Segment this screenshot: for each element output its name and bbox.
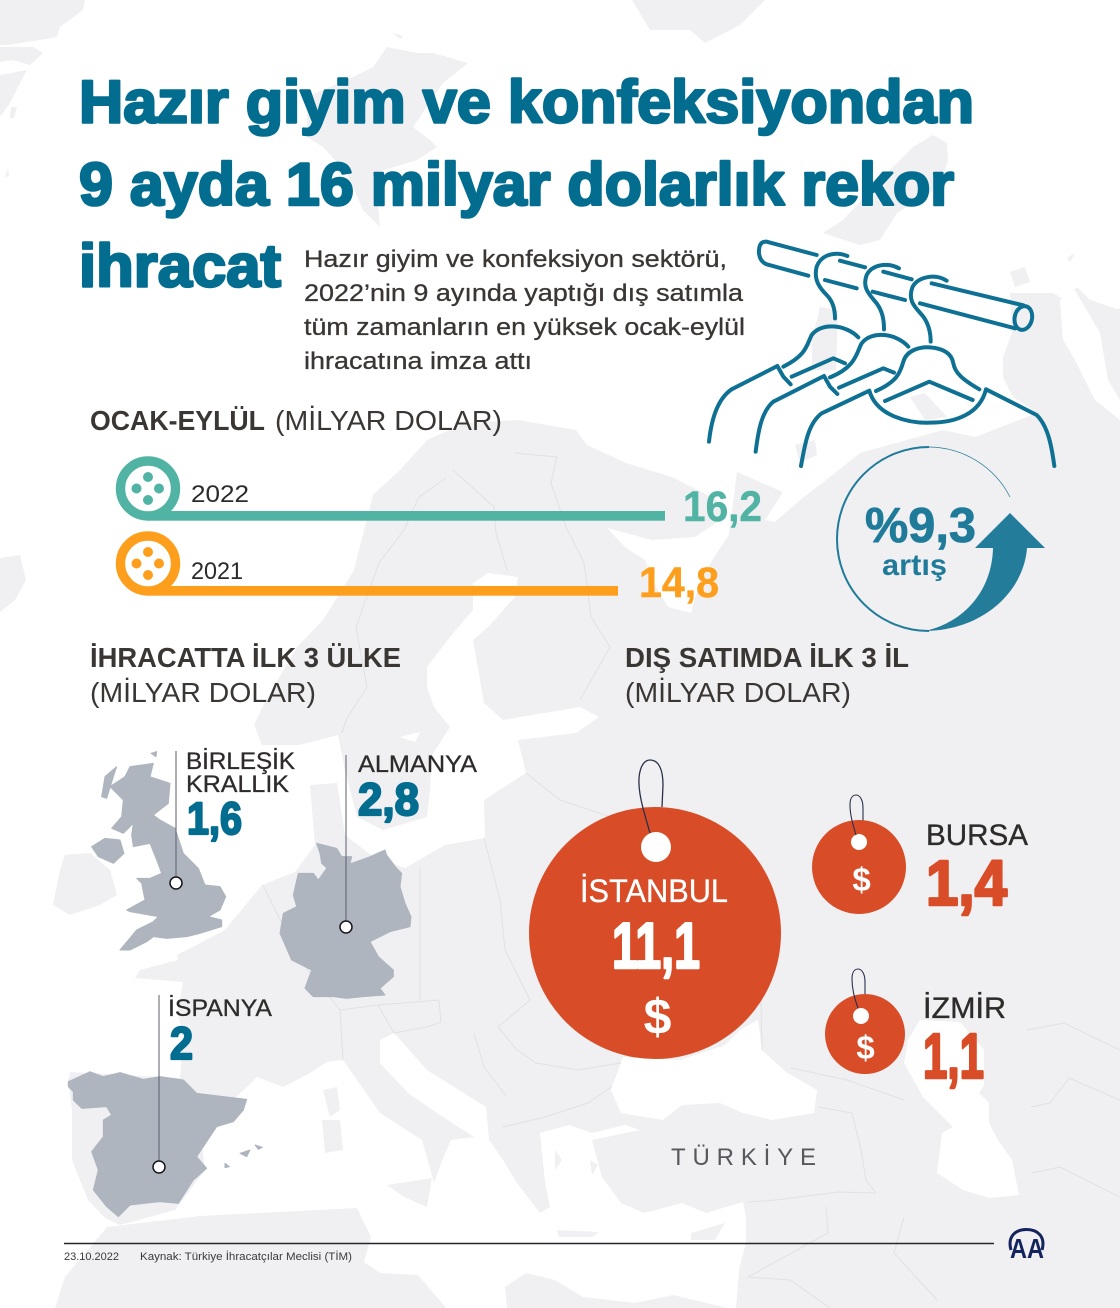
map: Germany <box>280 751 477 998</box>
title: Hazır giyim ve konfeksiyondan <box>79 68 974 136</box>
price tag: İzmir: $ <box>856 1029 875 1066</box>
heading: top 3 countries: (MİLYAR DOLAR) <box>90 677 316 708</box>
heading: top 3 provinces <box>625 642 909 708</box>
heading: top 3 provinces: (MİLYAR DOLAR) <box>625 677 851 708</box>
map label: Türkiye: TÜRKİYE <box>671 1144 816 1171</box>
map: Spain <box>68 995 272 1217</box>
heading: top 3 provinces: DIŞ SATIMDA İLK 3 İL <box>625 642 909 673</box>
callout: increase: %9,3 <box>865 499 976 553</box>
map: United Kingdom: BİRLEŞİK <box>186 748 295 775</box>
map: Spain: 2 <box>170 1018 193 1069</box>
price tag: İzmir: İZMİR <box>923 992 1006 1025</box>
map: United Kingdom <box>92 748 295 950</box>
price tag: İzmir <box>825 969 1006 1092</box>
bar: 2022: 2022 <box>191 481 249 508</box>
price tag: Bursa: $ <box>852 861 871 898</box>
price tag: İstanbul: $ <box>644 989 672 1045</box>
map: United Kingdom: 1,6 <box>187 793 242 844</box>
intro text <box>304 246 745 375</box>
price tag: İstanbul <box>529 760 781 1059</box>
icon: clothes hangers on a rail <box>709 242 1054 466</box>
intro text: ihracatına imza attı <box>304 348 532 375</box>
bar: 2021: 14,8 <box>639 559 719 607</box>
price tag: Bursa: 1,4 <box>926 847 1007 919</box>
heading: january-september: OCAK-EYLÜL <box>90 405 265 436</box>
intro text: 2022’nin 9 ayında yaptığı dış satımla <box>304 280 744 307</box>
map: Germany: ALMANYA <box>358 751 477 778</box>
map: Germany: 2,8 <box>358 774 419 825</box>
heading: january-september: (MİLYAR DOLAR) <box>275 405 502 436</box>
footer rule <box>64 1242 994 1244</box>
footer source: Kaynak: Türkiye İhracatçılar Meclisi (TİM) <box>140 1250 352 1263</box>
logo: AA: AA <box>1010 1233 1044 1264</box>
heading: top 3 countries <box>90 642 401 708</box>
callout: increase <box>837 447 1045 631</box>
bar: 2022 <box>120 461 762 531</box>
price tag: İzmir: 1,1 <box>923 1020 984 1092</box>
title: 9 ayda 16 milyar dolarlık rekor <box>79 151 954 218</box>
map: United Kingdom: KRALLIK <box>186 771 289 798</box>
heading: top 3 countries: İHRACATTA İLK 3 ÜLKE <box>90 642 401 673</box>
title: ihracat <box>79 232 281 300</box>
map: Spain: İSPANYA <box>168 995 272 1022</box>
intro text: tüm zamanların en yüksek ocak-eylül <box>304 314 745 341</box>
price tag: İstanbul: 11,1 <box>612 909 700 982</box>
price tag: Bursa: BURSA <box>926 819 1028 852</box>
intro text: Hazır giyim ve konfeksiyon sektörü, <box>304 246 727 273</box>
footer source <box>64 1250 352 1263</box>
title <box>79 68 974 300</box>
bar: 2021 <box>120 536 719 607</box>
seas drawn over land <box>400 290 1120 1198</box>
price tag: Bursa <box>812 795 1028 919</box>
footer source: 23.10.2022 <box>64 1251 119 1263</box>
bar: 2021: 2021 <box>191 558 243 585</box>
callout: increase: artış <box>882 549 947 582</box>
price tag: İstanbul: İSTANBUL <box>580 873 728 909</box>
bar: 2022: 16,2 <box>683 483 762 531</box>
